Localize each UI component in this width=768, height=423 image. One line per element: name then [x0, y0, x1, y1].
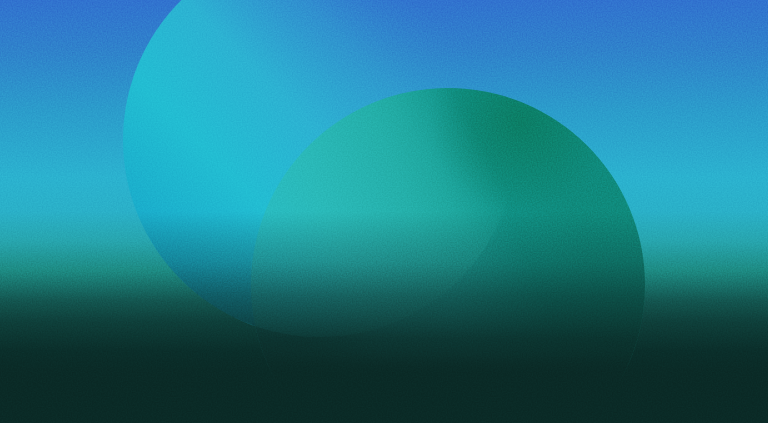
sphere: upper left blue circle [123, 0, 517, 337]
dark floor hiding the lower edge of the green sphere [0, 355, 768, 423]
sphere: lower right green circle [252, 88, 645, 373]
dark fade over the lower part of the spheres [140, 219, 645, 384]
overlap: lighter arc of the blue circle inside the green circle [376, 96, 486, 253]
